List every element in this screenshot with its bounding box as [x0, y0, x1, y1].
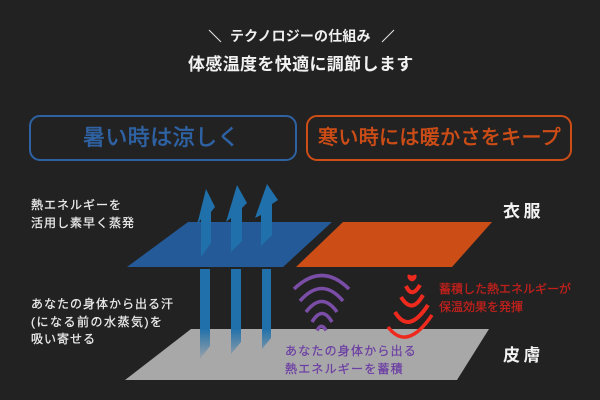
- button: warm label: 寒い時には暖かさをキープ: [318, 127, 561, 149]
- label: clothing: 衣服: [503, 202, 544, 221]
- text: warmth note: [439, 282, 571, 314]
- skin layer: [125, 329, 489, 380]
- text: stored heat note: 熱エネルギーを蓄積: [285, 362, 404, 376]
- text: stored heat note: あなたの身体から出る: [285, 344, 417, 358]
- text: evaporation note: 熱エネルギーを: [31, 198, 122, 212]
- text: vapor note: あなたの身体から出る汗: [31, 297, 174, 311]
- text: warmth note: 保温効果を発揮: [439, 300, 523, 314]
- button: warm label: [306, 115, 572, 161]
- text: vapor note: 吸い寄せる: [31, 332, 96, 346]
- text: evaporation note: 活用し素早く蒸発: [31, 216, 135, 230]
- icon: red stored heat: [388, 276, 432, 337]
- text: vapor note: (になる前の水蒸気)を: [31, 314, 164, 328]
- text: vapor note: [31, 297, 174, 346]
- lower shafts: vapor drawn upward: [200, 269, 271, 359]
- heading: small title with slashes: テクノロジーの仕組み: [230, 28, 371, 44]
- text: warmth note: 蓄積した熱エネルギーが: [439, 282, 571, 296]
- button: cool label: 暑い時は涼しく: [83, 125, 240, 150]
- clothing layer: cool: [127, 222, 332, 267]
- text: evaporation note: [31, 198, 135, 230]
- upward arrows: [197, 184, 278, 257]
- clothing layer: warm: [296, 222, 492, 267]
- label: skin: 皮膚: [503, 346, 544, 365]
- text: stored heat note: [285, 344, 417, 376]
- heading: main title: 体感温度を快適に調節します: [188, 55, 414, 74]
- button: cool label: [29, 115, 297, 161]
- icon: purple heat waves: [294, 276, 349, 330]
